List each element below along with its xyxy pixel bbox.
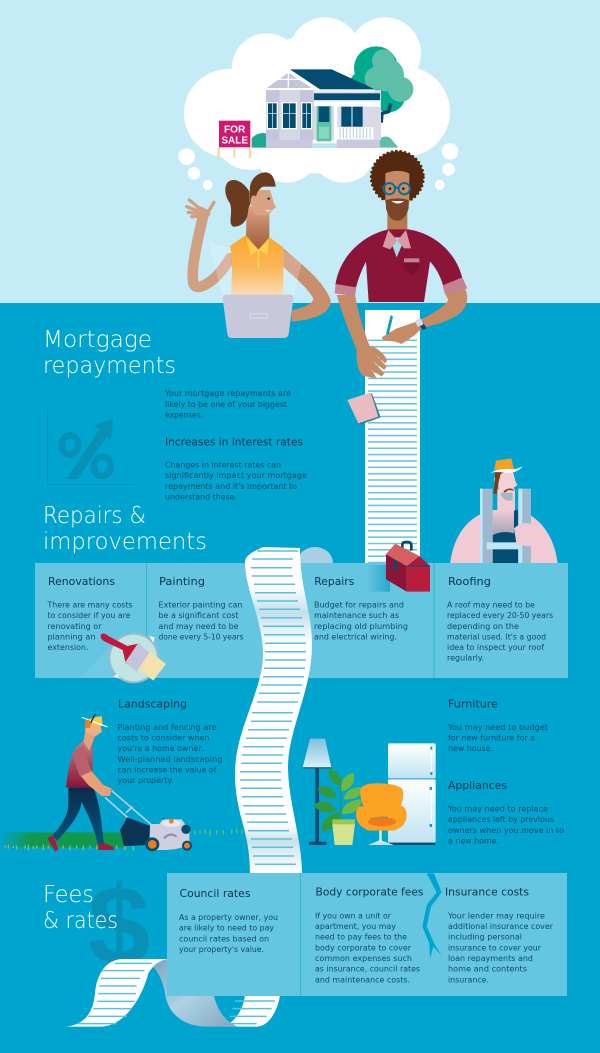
text: interest rates: Changes in interest rates can [165,460,281,470]
woman's other arm [283,248,331,322]
thought cloud with house [178,17,458,190]
panel text: Council rates: As a property owner, you [179,912,278,922]
mower handle [105,791,152,836]
text: Landscaping: your property. [118,775,174,785]
text: interest rates: understand these. [165,492,237,502]
panel text: Painting: Exterior painting can [158,600,242,610]
text: mortgage intro: Your mortgage repayments are [164,388,291,398]
panel text: Roofing: idea to inspect your roof [447,642,545,652]
crack in panel [422,873,442,958]
panel: repairs and improvements [35,547,568,678]
panel text: Painting: done every 5-10 years [158,632,244,642]
text: Landscaping: Well-planned landscaping [118,754,222,764]
bushes [252,133,398,148]
subheading: Increases in interest rates: Increases in interest rates [165,436,303,448]
face [385,171,409,213]
heading: Fees & rates: Fees [43,880,94,908]
lamp [303,739,331,845]
panel text: Body corporate fees: and maintenance costs. [315,974,410,984]
woman's raised arm and hand [187,200,230,287]
heading: Repairs & improvements: improvements [43,527,207,555]
panel text: Repairs: Budget for repairs and [314,600,404,610]
collar [246,237,269,268]
plant pot [332,819,355,845]
text: Appliances: appliances left by previous [448,814,554,824]
beard [386,198,409,221]
panel text: Repairs: and electrical wiring. [314,632,397,642]
illustration: roofer with ladder [450,458,558,569]
heading: Mortgage repayments: Mortgage [43,325,152,353]
text: Landscaping: Planting and fencing are [118,722,216,732]
fridge [388,743,436,845]
roofer's chest [493,510,515,536]
text: Landscaping: costs to consider when [118,732,210,742]
heading: Fees & rates [43,880,118,934]
man's left arm and hand [337,295,387,378]
receipt: curled bottom [65,959,281,1027]
panel text: Insurance costs: home and contents [448,964,527,974]
text: Landscaping: you're a home owner. [118,743,204,753]
icon: toolbox [367,542,430,592]
panel text: Council rates: Council rates [180,887,251,900]
panel text: Insurance costs: insurance. [448,974,489,984]
panel text: Insurance costs: insurance to cover your [448,942,542,952]
ponytail hair [225,172,276,227]
t-shirt [389,237,405,257]
legs [53,787,104,844]
text: Landscaping: can increase the value of [118,764,218,774]
smile and eye [265,197,271,212]
panel text: Renovations: renovating or [48,621,102,631]
panel text: Body corporate fees: need to pay fees to the [315,932,407,942]
illustration: woman with laptop [187,172,331,338]
text: mortgage intro: expenses. [165,410,203,420]
pen [386,315,393,335]
icon: rising percent [48,407,136,485]
panel text: Council rates: council rates based on [179,934,269,944]
arm [80,747,112,796]
panel text: Insurance costs: loan repayments and [448,953,533,963]
hair and moustache [493,471,515,494]
for sale sign: FOR [224,124,246,135]
illustration: man mowing lawn [0,715,242,851]
mower grass bag [120,817,150,846]
panel text: Roofing: regularly. [447,652,484,662]
for sale sign: SALE [221,135,248,146]
shirt cuffs [335,277,467,296]
heading: Mortgage repayments: repayments [43,351,176,379]
heading: Repairs & improvements [43,501,207,555]
panel text: Roofing: replaced every 20-50 years [447,610,553,620]
illustration: furniture and appliances [303,739,436,845]
text: Appliances: a new home. [448,836,499,846]
panel text: Body corporate fees: common expenses such [315,953,412,963]
panel text: Roofing: depending on the [447,621,519,631]
text: Appliances: You may need to replace [447,804,548,814]
shoes [47,835,114,851]
pink note [347,392,381,425]
grass [0,829,242,851]
panel text: Renovations: to consider if you are [48,610,130,620]
text: mortgage intro [164,388,291,420]
for sale sign [217,121,251,158]
panel text: Roofing: A roof may need to be [447,600,535,610]
roofer's overalls [493,510,518,564]
laptop light [208,242,302,297]
panel text: Painting: and may need to be [158,621,238,631]
panel text: Repairs: Repairs [314,575,355,588]
neck [83,728,97,751]
laptop [223,295,293,338]
background: sky [0,0,600,303]
panel: fees and rates [167,873,567,996]
panel text: Renovations: There are many costs [47,600,133,610]
face [251,190,276,216]
ladder [480,489,531,564]
tree [349,46,413,123]
text: Furniture: for new furniture for a [448,732,535,742]
text: mortgage intro: likely to be one of your biggest [165,399,288,409]
panel text: Roofing: Roofing [448,575,491,588]
text: Furniture [447,698,549,753]
cloud [178,17,458,190]
background: blue page [0,303,600,1053]
head [85,723,102,737]
beard stubble [501,493,513,501]
text: interest rates: repayments and it's important to [165,481,297,491]
shirt [66,742,93,787]
text: Appliances: owners when you move in to [448,825,564,835]
plant [313,768,363,832]
woman's neck [246,207,269,250]
roofer's head [498,471,517,500]
panel text: Renovations: planning an [48,632,96,642]
panel text: Insurance costs: including personal [448,932,522,942]
eyes [389,187,405,190]
text: Appliances [447,779,564,846]
woman's top [230,235,283,295]
afro [371,151,423,203]
ear [494,476,501,483]
panel text: Body corporate fees: body corporate to cover [315,942,412,952]
text: Furniture: new house. [448,743,493,753]
panel text: Insurance costs [445,886,554,984]
heading: Mortgage repayments [43,325,176,379]
panel text: Council rates [179,887,278,954]
mower wheels [145,837,192,851]
text: Furniture: Furniture [448,698,498,710]
armchair [356,783,407,845]
text: Furniture: You may need to budget [447,722,549,732]
icon: paint tin and brush [80,633,166,683]
heading: Fees & rates: & rates [43,906,118,934]
panel text: Painting: Painting [159,575,205,588]
mouth [391,201,404,203]
watch [415,318,427,330]
roofer's hand and neck [459,489,533,569]
illustration: man with glasses [335,151,467,378]
panel text: Body corporate fees: If you own a unit or [315,910,392,920]
panel text: Council rates: are likely to need to pay [179,922,274,932]
panel text: Body corporate fees: Body corporate fees [316,886,424,899]
man's shirt [335,229,462,302]
pocket [404,258,419,275]
collar [383,230,411,249]
glasses [382,183,410,194]
panel text: Insurance costs: Your lender may require [447,910,545,920]
mower deck [150,818,191,850]
roofer's torso and arms [450,512,558,564]
receipt: wavy paper [235,547,312,873]
man's neck [387,210,407,242]
icon: dollar sign: $ [88,863,150,988]
heading: Repairs & improvements: Repairs & [43,501,146,529]
text: Landscaping [118,698,222,785]
text: interest rates: significantly impact your mortgage [165,470,307,480]
panel text: Body corporate fees [315,886,424,984]
panel text: Insurance costs: additional insurance cover [448,921,554,931]
text: Appliances: Appliances [448,779,507,792]
man's right arm and hand [382,288,467,344]
sleeve [72,745,91,777]
house [259,69,381,148]
panel text: Renovations: Renovations [48,575,115,588]
hat and ear muffs [82,715,108,728]
text: interest rates [165,460,307,502]
panel text: Painting [158,575,244,642]
panel text: Repairs: replacing old plumbing [314,621,408,631]
panel text: Repairs: maintenance such as [314,610,399,620]
receipt: long vertical paper [365,310,420,563]
panel text: Body corporate fees: as insurance, council rates [315,964,420,974]
panel text: Renovations [47,575,133,652]
panel text: Renovations: extension. [48,642,88,652]
text: Landscaping: Landscaping [118,698,187,711]
panel text: Repairs [314,575,408,642]
panel text: Roofing [447,575,553,662]
panel text: Painting: be a significant cost [158,610,239,620]
hard hat [489,458,523,474]
panel text: Council rates: your property's value. [179,944,264,954]
panel text: Body corporate fees: apartment, you may [315,921,396,931]
panel text: Insurance costs: Insurance costs [445,886,529,899]
panel text: Roofing: material used. It's a good [447,632,546,642]
